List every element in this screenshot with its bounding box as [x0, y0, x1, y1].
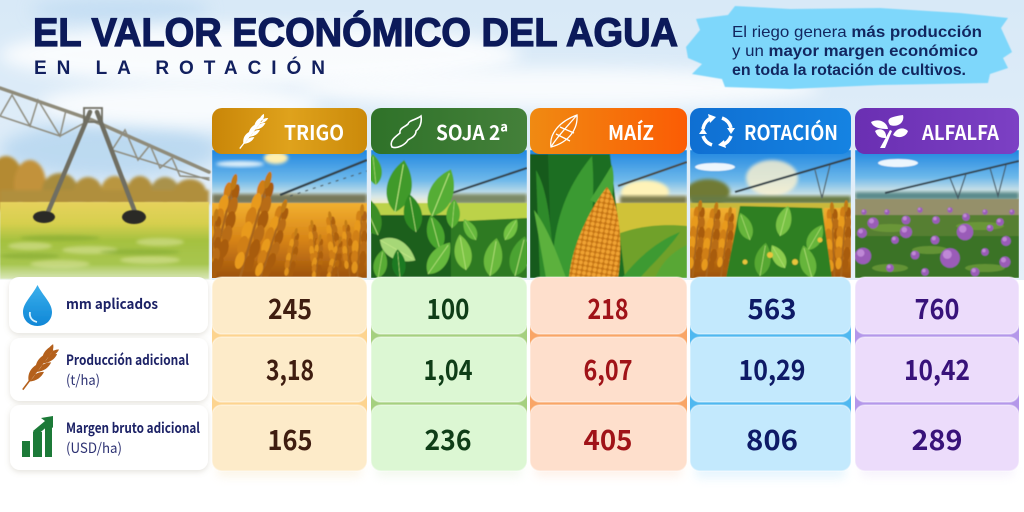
icon: corn	[551, 115, 577, 147]
rotacion header: ROTACIÓN	[744, 117, 838, 146]
values: maíz: 218	[588, 288, 628, 328]
maiz header	[530, 108, 687, 154]
panel: alfalfa	[855, 108, 1019, 278]
title: EL VALOR ECONÓMICO DEL AGUA	[33, 9, 678, 55]
row label: margen bruto adicional: (USD/ha)	[66, 438, 122, 458]
panel: rotación	[684, 108, 854, 285]
row label: mm aplicados	[9, 277, 208, 333]
row label: producción adicional	[10, 338, 208, 401]
alfalfa photo	[855, 150, 1019, 278]
values: rotación	[690, 277, 851, 478]
values: maíz	[530, 277, 687, 476]
icon: wheat	[237, 113, 269, 152]
values: rotación: 806	[746, 419, 798, 459]
panel: trigo	[212, 108, 367, 278]
row label: mm aplicados: mm aplicados	[66, 294, 158, 314]
subtitle: EN LA ROTACIÓN	[34, 57, 325, 79]
row label: producción adicional: (t/ha)	[66, 370, 100, 390]
maiz header: MAÍZ	[608, 117, 654, 146]
callout: en toda la rotación de cultivos.	[732, 62, 966, 79]
values: soja: 100	[426, 288, 470, 328]
panel: soja 2ª	[371, 108, 527, 278]
icon: water drop	[23, 285, 52, 326]
values: soja: 1,04	[424, 349, 472, 389]
icon: center pivot irrigation tower	[0, 88, 209, 224]
values: rotación: 563	[748, 288, 796, 328]
soja header: SOJA 2ª	[436, 117, 508, 146]
icon: wheat leaf	[18, 343, 61, 394]
rotacion header	[690, 108, 851, 154]
icon: bar chart with arrow	[22, 416, 53, 457]
values: alfalfa: 289	[912, 419, 962, 459]
callout: El riego genera más producción	[732, 24, 982, 41]
values: soja: 236	[424, 419, 472, 459]
maiz photo	[530, 150, 687, 278]
row label: margen bruto adicional	[10, 405, 208, 470]
row label: margen bruto adicional: Margen bruto adicional	[66, 418, 200, 438]
trigo header: TRIGO	[284, 117, 344, 146]
values: trigo: 165	[268, 419, 312, 459]
icon: rotation arrows	[699, 114, 735, 148]
trigo photo	[212, 150, 367, 278]
values: maíz: 405	[584, 419, 632, 459]
values: trigo: 245	[268, 288, 312, 328]
row label: producción adicional: Producción adicional	[66, 350, 189, 370]
values: alfalfa: 760	[914, 288, 960, 328]
values: alfalfa: 10,42	[904, 349, 970, 389]
alfalfa header	[855, 108, 1019, 154]
values: alfalfa	[855, 277, 1019, 476]
icon: soy pod	[391, 116, 421, 148]
alfalfa header: ALFALFA	[921, 117, 999, 146]
soja header	[371, 108, 527, 154]
rotacion photo	[684, 150, 854, 285]
soja photo	[371, 150, 527, 278]
callout: y un mayor margen económico	[732, 43, 978, 60]
values: trigo	[212, 277, 367, 476]
values: rotación: 10,29	[738, 349, 806, 389]
icon: alfalfa leaves	[871, 115, 908, 148]
values: maíz: 6,07	[584, 349, 632, 389]
values: trigo: 3,18	[266, 349, 314, 389]
panel: maíz	[530, 108, 687, 278]
background irrigation field scene	[0, 156, 212, 290]
callout	[686, 6, 1012, 89]
trigo header	[212, 108, 367, 154]
values: soja	[371, 277, 527, 476]
